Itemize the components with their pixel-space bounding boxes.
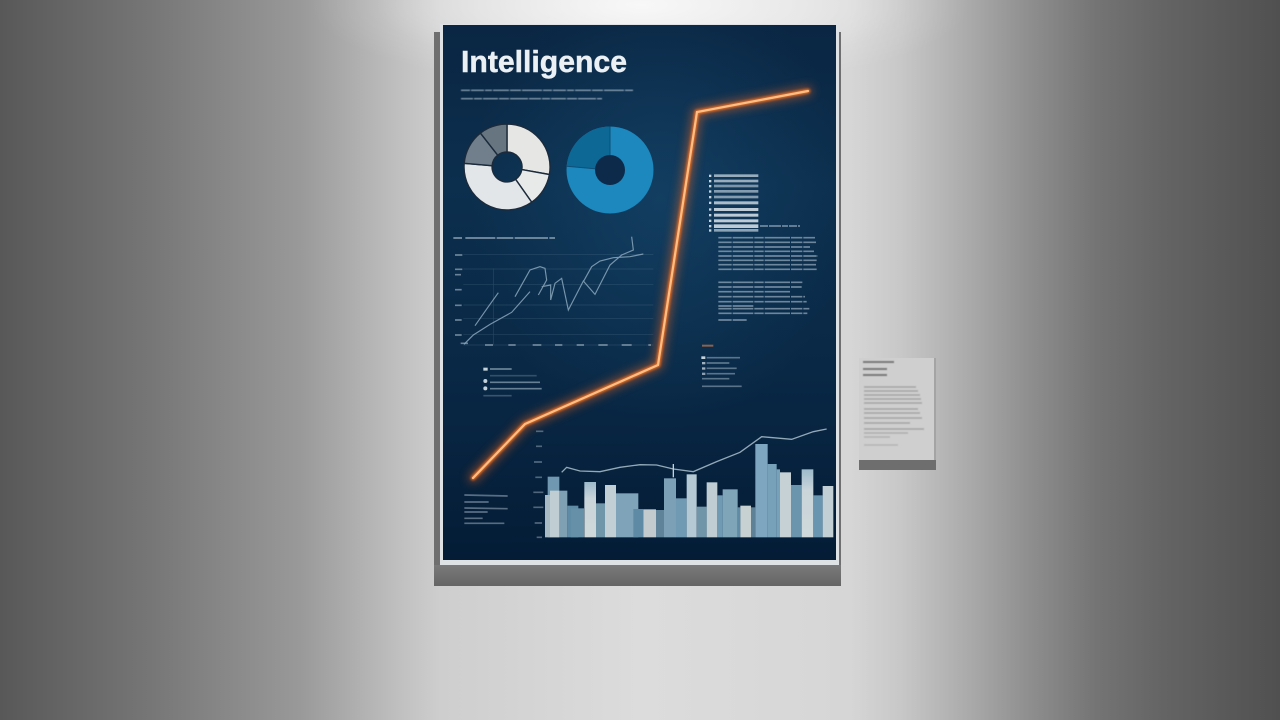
right column list [709,168,818,320]
chart grid [463,254,653,345]
bars [545,444,833,537]
poster panel [443,25,836,560]
title: Intelligence [461,44,627,79]
chart legend [483,368,542,396]
right column text blocks (illegible) [718,226,818,320]
y axis ticks (illegible) [533,431,543,537]
wall caption card [859,358,936,470]
lower right mini legend [701,346,742,386]
x axis labels (illegible) [565,542,828,547]
donut chart: blue segments [566,126,654,214]
chart series [464,237,643,344]
intro text block (illegible greeked lines) [461,90,633,99]
caption text (illegible) [863,362,924,445]
line chart [453,237,653,345]
bar and line combo chart [533,429,833,545]
lower left text block (illegible) [464,495,508,523]
poster frame [434,24,841,586]
list bars [709,174,758,232]
trend line over bars [562,429,827,477]
chart heading and axis labels (illegible) [453,238,651,345]
orange rising trend line [473,91,808,478]
donut chart: white segments [464,124,550,210]
